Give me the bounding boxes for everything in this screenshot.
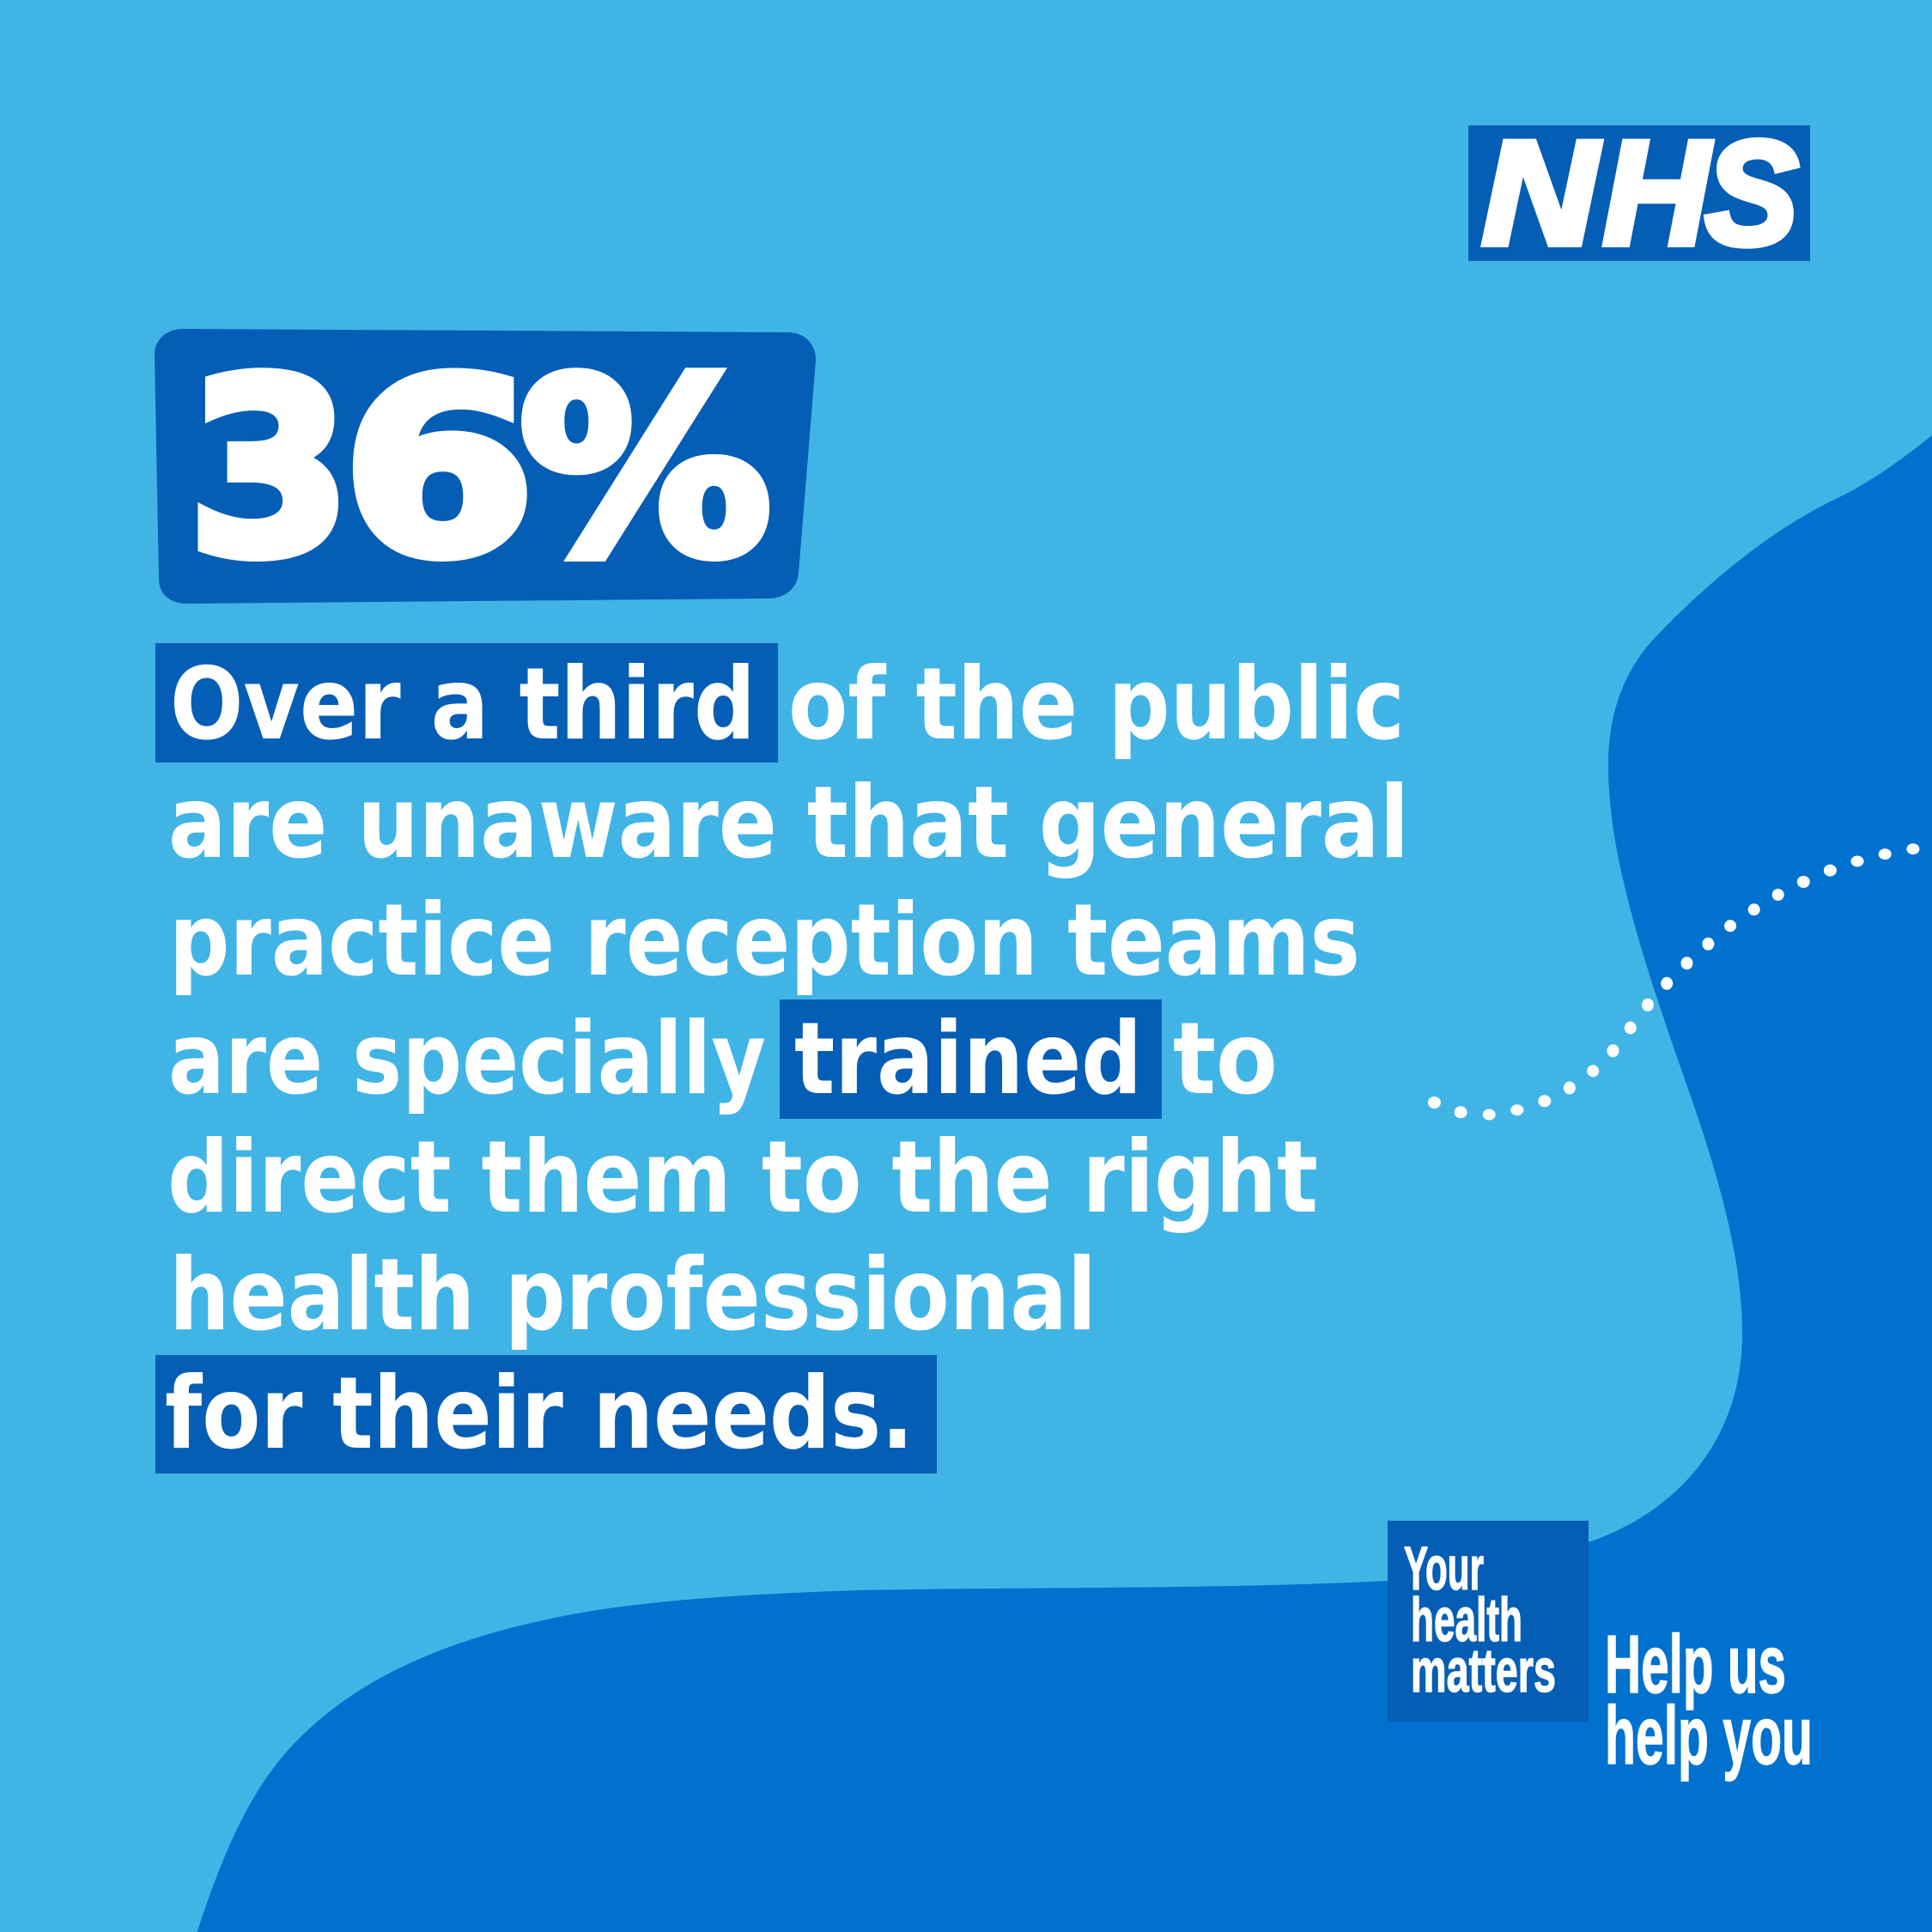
statistic badge: 36%: % — [519, 330, 771, 610]
highlighted word: trained: trained — [794, 1001, 1142, 1117]
background wave shape — [197, 435, 1932, 1932]
Your health matters logo: health — [1411, 1587, 1522, 1655]
body text: practice reception teams — [169, 883, 1360, 999]
body text: to — [1173, 1001, 1278, 1117]
highlighted phrase: Over a third: Over a third — [170, 647, 756, 762]
body text — [167, 647, 1409, 1353]
body text: are specially — [168, 1001, 766, 1117]
highlighted phrase: for their needs.: for their needs. — [165, 1356, 914, 1472]
NHS logo: S — [1705, 111, 1798, 276]
NHS logo — [1468, 111, 1810, 276]
Your health matters logo: Your — [1404, 1535, 1484, 1603]
Your health matters logo — [1388, 1521, 1589, 1722]
body text: are unaware that general — [168, 765, 1409, 881]
body text: direct them to the right — [167, 1120, 1318, 1236]
dotted curved line — [1428, 843, 1919, 1120]
NHS logo: H — [1603, 111, 1712, 276]
body text: of the public — [788, 647, 1405, 762]
tagline: Help us help you — [1605, 1619, 1813, 1782]
tagline: Help us help you: Help us — [1605, 1619, 1786, 1710]
body text: health professional — [169, 1237, 1097, 1353]
NHS logo: N — [1482, 111, 1601, 276]
statistic badge: 36%: 6 — [343, 330, 535, 610]
statistic badge: 36%: 3 — [188, 330, 351, 610]
statistic badge: 36% — [155, 329, 816, 610]
Your health matters logo: matters — [1411, 1637, 1556, 1705]
